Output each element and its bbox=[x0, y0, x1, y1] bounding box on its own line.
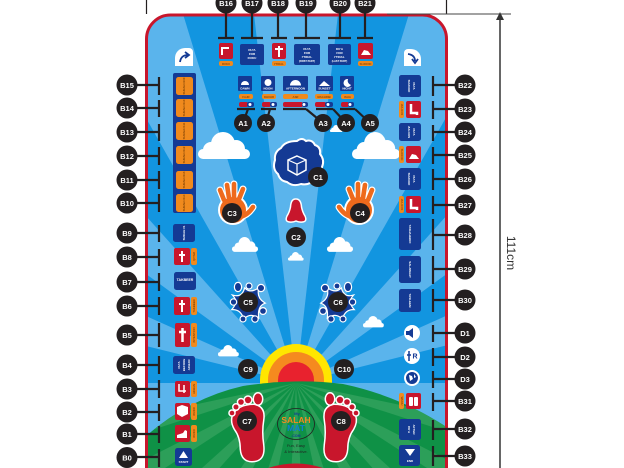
icon: C5 left knee splash bbox=[231, 283, 266, 322]
callouts: left column B0-B15: B3 bbox=[122, 385, 132, 394]
callouts: left column B0-B15: B13 bbox=[120, 128, 134, 137]
callouts: body positions C1-C10: C1 bbox=[313, 173, 323, 182]
panel: top buttons B16-B21: I'TIDAL bbox=[274, 62, 284, 66]
callouts: left column B0-B15: B2 bbox=[122, 408, 132, 417]
icon: C6 right knee splash bbox=[320, 283, 355, 322]
panel: right buttons B22-B33: SUJOOD bbox=[400, 149, 404, 160]
icon: C7 left foot bbox=[230, 394, 263, 461]
logo: My Salah Mat: Fun, Easy bbox=[287, 443, 305, 448]
callouts: right column B22-B33 and D1-D3: B29 bbox=[458, 265, 472, 274]
callouts: right column B22-B33 and D1-D3 bbox=[433, 74, 476, 466]
callouts: right column B22-B33 and D1-D3: B24 bbox=[458, 128, 473, 137]
callouts: right column B22-B33 and D1-D3: B32 bbox=[458, 425, 472, 434]
callouts: left column B0-B15: B6 bbox=[122, 302, 132, 311]
panel: top buttons B16-B21: (FIRST PART) bbox=[299, 60, 315, 63]
callouts: left column B0-B15: B10 bbox=[120, 199, 134, 208]
panel: prayer times bbox=[238, 76, 354, 107]
green hill bbox=[146, 381, 448, 468]
panel: right buttons B22-B33: SUJOOD bbox=[407, 173, 411, 186]
sun bbox=[260, 344, 332, 384]
panel: prayer times: SUNSET bbox=[318, 86, 331, 90]
panel: left surah column B10-B15: SURAH #114 bbox=[182, 194, 186, 211]
callouts: right column B22-B33 and D1-D3: B31 bbox=[458, 397, 472, 406]
panel: top buttons B16-B21: DU'A bbox=[303, 47, 311, 51]
panel: right buttons B22-B33: DU'A bbox=[407, 426, 411, 434]
panel: left surah column B10-B15: SURAH #113 bbox=[182, 171, 186, 188]
callouts: left column B0-B15: B15 bbox=[120, 81, 134, 90]
callouts: right column B22-B33 and D1-D3: D2 bbox=[460, 353, 470, 362]
logo: My Salah Mat: & Interactive. bbox=[284, 449, 308, 454]
callouts: body positions C1-C10: C9 bbox=[243, 365, 253, 374]
panel: prayer times: AFTERNOON bbox=[286, 86, 305, 90]
callouts: right column B22-B33 and D1-D3: B26 bbox=[458, 175, 472, 184]
panel: top buttons B16-B21: FOR bbox=[304, 51, 311, 55]
panel: left buttons B0-B9: SURAH #1 bbox=[182, 225, 186, 240]
callouts: left column B0-B15: B11 bbox=[120, 176, 134, 185]
panel: prayer times: MAGHRIB bbox=[317, 95, 331, 99]
callouts: body positions C1-C10 bbox=[222, 167, 370, 431]
panel: prayer times: NIGHT bbox=[342, 86, 352, 90]
panel: prayer times: DHUHR bbox=[264, 95, 274, 99]
icons: sound, reciter and language buttons bbox=[404, 325, 420, 386]
callouts: left column B0-B15: B8 bbox=[122, 253, 132, 262]
callouts: right column B22-B33 and D1-D3: B30 bbox=[458, 296, 472, 305]
panel: right buttons B22-B33: AFTER bbox=[412, 424, 416, 435]
icon: C4 right hand bbox=[339, 184, 374, 225]
callouts: body positions C1-C10: C7 bbox=[242, 417, 252, 426]
callouts: left column B0-B15: B1 bbox=[122, 430, 132, 439]
callouts: top row B16-B21 bbox=[216, 0, 376, 38]
logo: My Salah Mat bbox=[278, 408, 314, 454]
panel: left buttons B0-B9: START bbox=[179, 460, 189, 464]
panel: top buttons B16-B21: SUJOOD bbox=[360, 62, 371, 66]
arrow tile: left bbox=[175, 48, 193, 66]
callouts: body positions C1-C10: C10 bbox=[337, 365, 351, 374]
panel: top buttons B16-B21: FOR bbox=[249, 52, 256, 56]
panel: right buttons B22-B33: JULOOS bbox=[407, 126, 411, 138]
panel: top buttons B16-B21: DU'A bbox=[336, 47, 344, 51]
panel: prayer times: DAWN bbox=[240, 86, 250, 90]
callouts: prayer times A1-A5: A3 bbox=[318, 119, 328, 128]
icon: C1 kaaba on blue splash bbox=[274, 139, 323, 185]
panel: top buttons B16-B21: RUKU bbox=[222, 62, 230, 66]
panel: right buttons B22-B33: WUDU bbox=[400, 397, 404, 405]
callouts: right column B22-B33 and D1-D3: B25 bbox=[458, 151, 472, 160]
callouts: body positions C1-C10: C4 bbox=[355, 209, 366, 218]
dimension lines and 111cm label: 111cm bbox=[504, 236, 518, 270]
panel: top buttons B16-B21: RUKU bbox=[248, 56, 256, 60]
panel: left buttons B0-B9 bbox=[173, 224, 197, 466]
panel: left buttons B0-B9: WUDU bbox=[192, 407, 196, 416]
panel: left buttons B0-B9: TAKBEER bbox=[192, 299, 196, 313]
panel: top buttons B16-B21 bbox=[219, 43, 373, 66]
panel: left surah column B10-B15: SURAH #109 bbox=[182, 77, 186, 94]
panel: top buttons B16-B21: (LAST PART) bbox=[332, 60, 347, 63]
panel: left surah column B10-B15: SURAH #111 bbox=[182, 122, 186, 139]
panel: right buttons B22-B33: DU'A bbox=[412, 175, 416, 183]
panel: left buttons B0-B9: INTENTION bbox=[192, 327, 196, 343]
callouts: left column B0-B15: B14 bbox=[120, 104, 135, 113]
panel: prayer times: ASR bbox=[293, 95, 298, 99]
icon: C2 nose bbox=[286, 199, 306, 222]
panel: top buttons B16-B21: FOR bbox=[336, 51, 343, 55]
callouts: left column B0-B15: B9 bbox=[122, 229, 132, 238]
callouts: right column B22-B33 and D1-D3: B28 bbox=[458, 231, 472, 240]
panel: top buttons B16-B21: I'TIDAL bbox=[334, 55, 345, 59]
logo: My Salah Mat: .COM bbox=[291, 434, 301, 438]
callouts: left column B0-B15 bbox=[116, 74, 159, 468]
callouts: left column B0-B15: B5 bbox=[122, 331, 132, 340]
callouts: prayer times A1-A5: A5 bbox=[365, 119, 375, 128]
callouts: body positions C1-C10: C6 bbox=[333, 298, 343, 307]
callouts: left column B0-B15: B4 bbox=[122, 361, 133, 370]
panel: top buttons B16-B21: DU'A bbox=[248, 48, 256, 52]
panel: left surah column B10-B15: SURAH #110 bbox=[182, 99, 186, 116]
panel: right buttons B22-B33: JULOOS bbox=[400, 199, 404, 210]
panel: left surah column B10-B15 bbox=[173, 73, 196, 213]
panel: left buttons B0-B9: QIYAM bbox=[192, 251, 196, 261]
panel: right buttons B22-B33: JULOOS bbox=[400, 104, 404, 115]
panel: left buttons B0-B9: WUDU bbox=[192, 429, 196, 438]
callouts: right column B22-B33 and D1-D3: D1 bbox=[460, 329, 470, 338]
callouts: body positions C1-C10: C8 bbox=[336, 417, 346, 426]
callouts: left column B0-B15: B7 bbox=[122, 278, 132, 287]
callouts: body positions C1-C10: C2 bbox=[291, 233, 301, 242]
callouts: right column B22-B33 and D1-D3: D3 bbox=[460, 375, 470, 384]
panel: left buttons B0-B9: TAKBEER bbox=[177, 278, 194, 282]
panel: left buttons B0-B9: ADHAN bbox=[192, 384, 196, 394]
panel: prayer times: ISHA bbox=[344, 95, 351, 99]
panel: left surah column B10-B15: SURAH #112 bbox=[182, 146, 186, 163]
logo: My Salah Mat: SALAH bbox=[281, 415, 311, 425]
panel: right buttons B22-B33: TASHAHHUD bbox=[408, 225, 412, 244]
callouts: prayer times A1-A5: A2 bbox=[261, 119, 271, 128]
arrow tile: right bbox=[404, 49, 421, 66]
panel: left buttons B0-B9: BEFORE bbox=[182, 359, 186, 371]
callouts: prayer times A1-A5: A4 bbox=[341, 119, 352, 128]
callouts: left column B0-B15: B0 bbox=[122, 454, 132, 462]
clouds bbox=[198, 125, 400, 356]
panel: right buttons B22-B33: END bbox=[407, 459, 414, 463]
panel: prayer times: NOON bbox=[264, 86, 272, 90]
callouts: right column B22-B33 and D1-D3: B22 bbox=[458, 81, 472, 90]
icon: C8 right foot bbox=[325, 394, 358, 461]
callouts: prayer times A1-A5 bbox=[234, 109, 379, 132]
callouts: right column B22-B33 and D1-D3: B27 bbox=[458, 201, 472, 210]
callouts: body positions C1-C10: C3 bbox=[227, 209, 237, 218]
callouts: body positions C1-C10: C5 bbox=[243, 298, 253, 307]
icon: C3 left hand bbox=[218, 184, 253, 225]
panel: left buttons B0-B9: ADHAN bbox=[187, 360, 191, 370]
callouts: prayer times A1-A5: A1 bbox=[238, 119, 248, 128]
panel: top buttons B16-B21: I'TIDAL bbox=[302, 55, 312, 59]
panel: right buttons B22-B33: DU'A bbox=[412, 82, 416, 90]
icons: sound, reciter and language buttons: R bbox=[412, 354, 418, 360]
dimension lines and 111cm label bbox=[146, 0, 518, 468]
panel: right buttons B22-B33 bbox=[399, 75, 421, 466]
callouts: right column B22-B33 and D1-D3: B33 bbox=[458, 452, 472, 461]
logo: My Salah Mat: My bbox=[294, 411, 301, 416]
panel: right buttons B22-B33: SALAWAAT bbox=[408, 261, 412, 278]
panel: prayer times: FAJR bbox=[242, 95, 250, 99]
panel: right buttons B22-B33: TASLEEM bbox=[408, 293, 412, 308]
panel: right buttons B22-B33: DU'A bbox=[412, 128, 416, 136]
panel: right buttons B22-B33: SUJOOD bbox=[407, 80, 411, 93]
mat background with sky rays bbox=[146, 14, 448, 468]
callouts: left column B0-B15: B12 bbox=[120, 152, 134, 161]
callouts: right column B22-B33 and D1-D3: B23 bbox=[458, 105, 472, 114]
logo: My Salah Mat: MAT bbox=[287, 423, 306, 433]
mat red border bbox=[146, 15, 447, 468]
panel: left buttons B0-B9: DU'A bbox=[177, 361, 181, 369]
